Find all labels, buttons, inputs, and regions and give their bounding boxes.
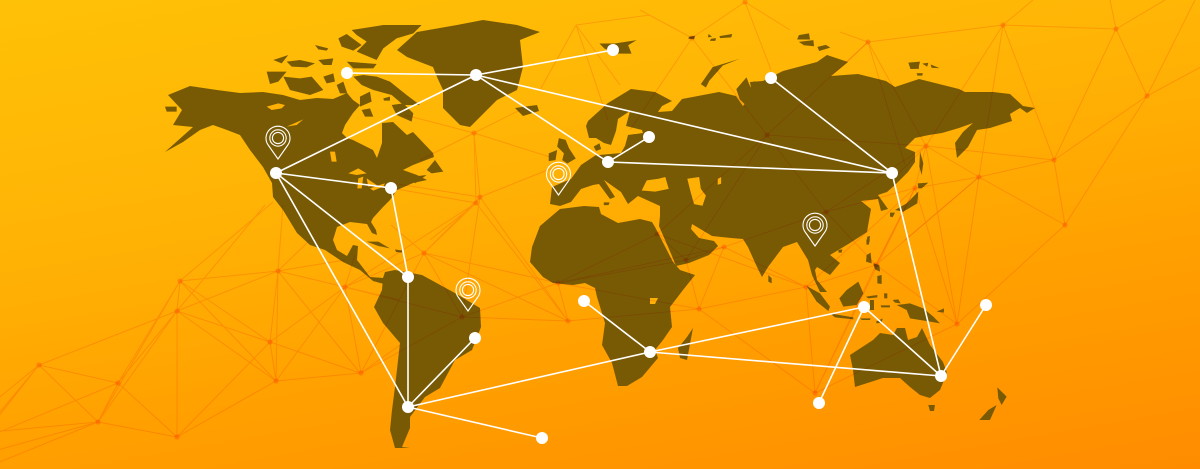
icon: map pin Europe bbox=[546, 162, 570, 195]
map: Africa bbox=[530, 206, 695, 386]
map: North America bbox=[165, 86, 434, 284]
Lake Victoria bbox=[650, 298, 658, 304]
map: Madagascar bbox=[678, 328, 693, 360]
map: Arctic islands bbox=[165, 25, 443, 183]
map: Oceania and southeast Asian islands bbox=[768, 236, 1007, 420]
map: Greenland bbox=[397, 20, 540, 127]
map: Eurasia bbox=[550, 55, 1035, 292]
Caspian Sea bbox=[687, 177, 706, 206]
map: inland seas and lakes bbox=[267, 103, 721, 304]
map: South America bbox=[374, 270, 481, 448]
icon: map pin South America bbox=[456, 278, 480, 311]
icon: map pin North America bbox=[266, 126, 290, 159]
Black Sea bbox=[642, 177, 669, 192]
white connection nodes bbox=[270, 44, 992, 444]
Aral Sea bbox=[718, 177, 721, 185]
map: Japan and Sakhalin bbox=[890, 62, 939, 217]
world map bbox=[165, 20, 1035, 448]
map: Caribbean islands bbox=[367, 242, 402, 253]
Canadian and Great Lakes bbox=[267, 103, 385, 191]
icon: map pin Asia bbox=[803, 213, 827, 246]
white connection lines bbox=[276, 50, 986, 438]
map: European and Arctic Russian islands bbox=[549, 33, 939, 245]
map: Australia bbox=[850, 328, 947, 398]
map: Iceland bbox=[515, 105, 539, 116]
